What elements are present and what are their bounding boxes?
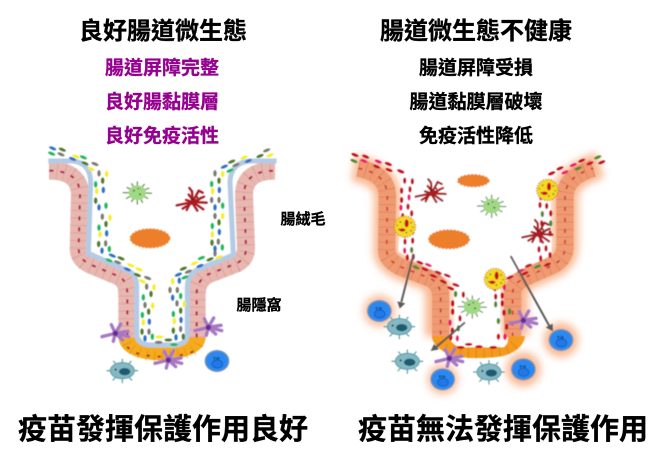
white gut lumen [398, 157, 552, 347]
unhealthy feature list: 腸道屏障受損 [419, 56, 533, 79]
arrow: translocation center [431, 322, 465, 351]
orange crypt base [432, 336, 525, 358]
healthy feature list [105, 56, 219, 147]
pink epithelium wall [49, 171, 275, 339]
diagram: unhealthy intestinal crypt [350, 152, 606, 395]
commensal bacteria [48, 146, 274, 346]
unhealthy feature list: 免疫活性降低 [419, 124, 533, 147]
icon: yellow pathogens breaching the wall [394, 179, 558, 290]
icon: teal immune cell [107, 359, 138, 383]
blue mucus layer [48, 161, 277, 345]
healthy feature list: 良好免疫活性 [105, 124, 219, 147]
arrow: translocation down right [511, 256, 553, 331]
icon: purple dendritic cells [436, 311, 537, 366]
icon: green microbes [458, 195, 506, 319]
title: healthy microbiome: 良好腸道微生態 [79, 18, 247, 45]
healthy feature list: 良好腸黏膜層 [105, 90, 219, 113]
icon: blue Th cells [367, 300, 573, 390]
unhealthy feature list [409, 56, 543, 147]
icon: orange food particle [130, 229, 170, 248]
icon: orange particles [429, 175, 489, 249]
arrow: translocation down left [397, 255, 413, 309]
unhealthy feature list: 腸道黏膜層破壞 [409, 90, 543, 113]
salmon epithelium wall [358, 168, 593, 337]
title: unhealthy microbiome: 腸道微生態不健康 [380, 18, 572, 45]
icon: red dendritic microbes [416, 179, 552, 243]
orange crypt base [118, 334, 206, 360]
label: villus: 腸絨毛 [280, 211, 326, 228]
healthy feature list: 腸道屏障完整 [105, 56, 219, 79]
icon: red dendritic microbe [177, 188, 207, 211]
icon: teal immune cells [384, 315, 504, 384]
label: crypt: 腸隱窩 [236, 296, 282, 314]
diagram: healthy intestinal crypt [48, 146, 277, 383]
icon: green microbe [123, 181, 152, 205]
icon: purple dendritic cells [102, 318, 222, 368]
icon: blue Th cell [205, 350, 229, 372]
conclusion: vaccine works well: 疫苗發揮保護作用良好 [18, 413, 308, 446]
orange inflammation glow [353, 165, 600, 395]
conclusion: vaccine cannot work: 疫苗無法發揮保護作用 [358, 413, 648, 446]
pathogenic bacteria [350, 152, 606, 349]
